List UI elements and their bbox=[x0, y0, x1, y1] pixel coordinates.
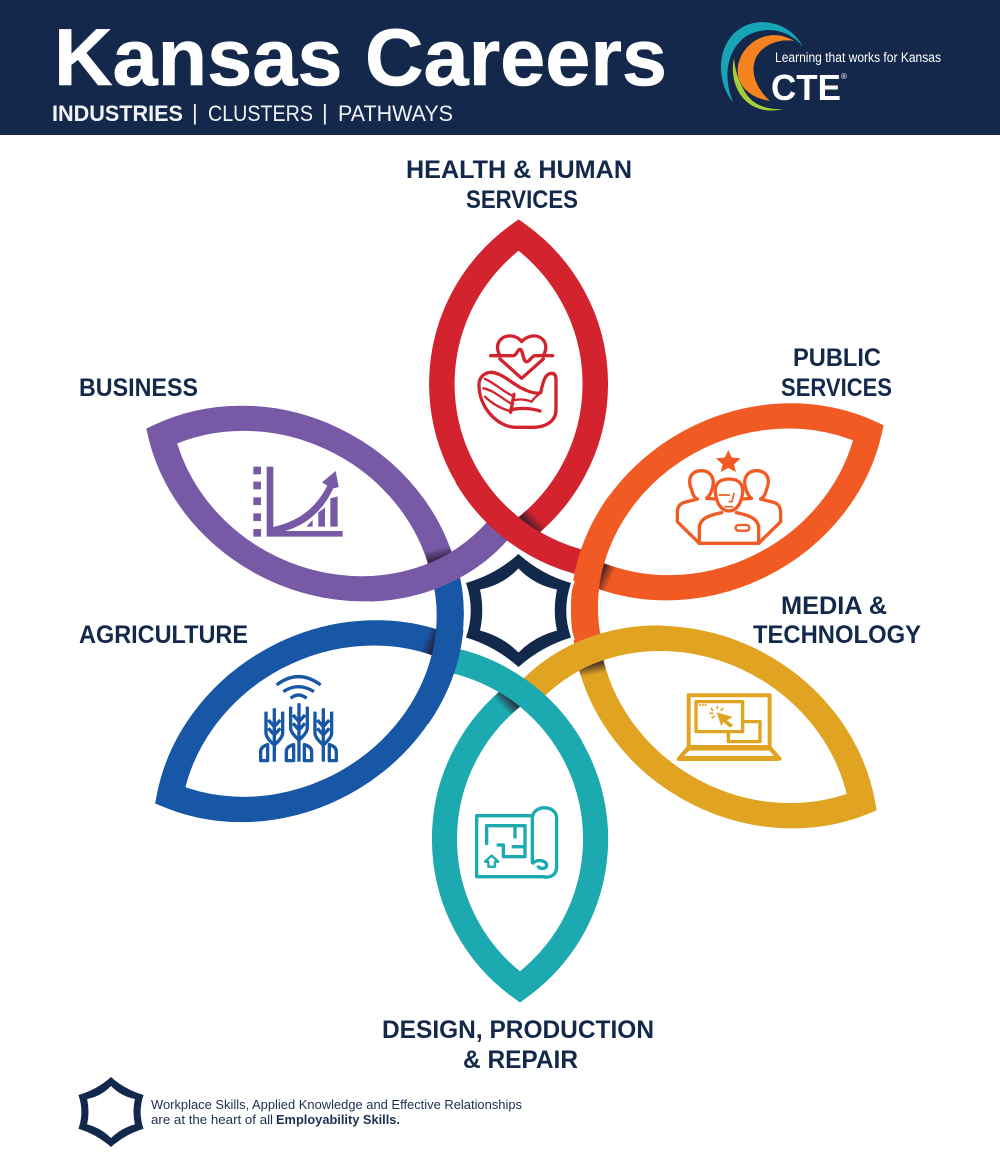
logo: CTE: CTE bbox=[771, 67, 841, 108]
petal: design, production and repair bbox=[444, 660, 596, 987]
subtitle bbox=[52, 100, 453, 126]
subtitle: INDUSTRIES bbox=[52, 101, 183, 126]
heading: public services bbox=[781, 344, 892, 402]
logo: CTE: ® bbox=[841, 72, 847, 81]
petal: health and human services bbox=[442, 235, 595, 565]
petal: agriculture bbox=[136, 568, 510, 858]
heading: design, production and repair: & REPAIR bbox=[463, 1046, 578, 1074]
subtitle: PATHWAYS bbox=[338, 101, 453, 126]
subtitle: | bbox=[192, 100, 198, 125]
heading: media and technology: TECHNOLOGY bbox=[753, 621, 921, 649]
heading: public services: PUBLIC bbox=[793, 344, 881, 372]
heading: health and human services: SERVICES bbox=[466, 186, 578, 214]
logo: CTE: Learning that works for Kansas bbox=[775, 50, 941, 65]
petal: business bbox=[131, 372, 504, 650]
icon: group of people with star bbox=[677, 450, 781, 543]
icon: rising bar chart bbox=[253, 467, 343, 537]
logo: CTE bbox=[721, 22, 941, 111]
title: Kansas Careers bbox=[54, 13, 667, 103]
heading: design, production and repair bbox=[382, 1016, 654, 1074]
center hexagon bbox=[466, 554, 571, 667]
heading: health and human services bbox=[406, 156, 632, 214]
header banner bbox=[0, 0, 1000, 135]
icon: heart in hand bbox=[479, 336, 556, 427]
legend bbox=[78, 1077, 522, 1147]
petal overlap: agriculture strand over design strand bbox=[388, 629, 479, 718]
petal: media and technology bbox=[525, 573, 896, 865]
heading: public services: SERVICES bbox=[781, 374, 892, 402]
heading: design, production and repair: DESIGN, PRODUCTION bbox=[382, 1016, 654, 1044]
icon: wheat with wireless signal bbox=[261, 677, 336, 762]
petal: public services bbox=[527, 369, 900, 650]
heading: agriculture: AGRICULTURE bbox=[79, 621, 248, 649]
legend text: are at the heart of all bbox=[151, 1113, 273, 1127]
heading: media and technology: MEDIA & bbox=[781, 592, 887, 620]
legend text bbox=[151, 1098, 522, 1127]
icon: legend hexagon bbox=[78, 1077, 144, 1147]
heading: health and human services: HEALTH & HUMAN bbox=[406, 156, 632, 184]
heading: media and technology bbox=[753, 592, 921, 649]
subtitle: CLUSTERS bbox=[208, 101, 313, 126]
icon: laptop with cursor bbox=[677, 695, 782, 761]
subtitle: | bbox=[322, 100, 328, 125]
legend text: Employability Skills. bbox=[276, 1113, 400, 1127]
legend text: Workplace Skills, Applied Knowledge and Effective Relationships bbox=[151, 1098, 522, 1112]
icon: building blueprint bbox=[477, 808, 557, 877]
heading: business: BUSINESS bbox=[79, 374, 198, 402]
